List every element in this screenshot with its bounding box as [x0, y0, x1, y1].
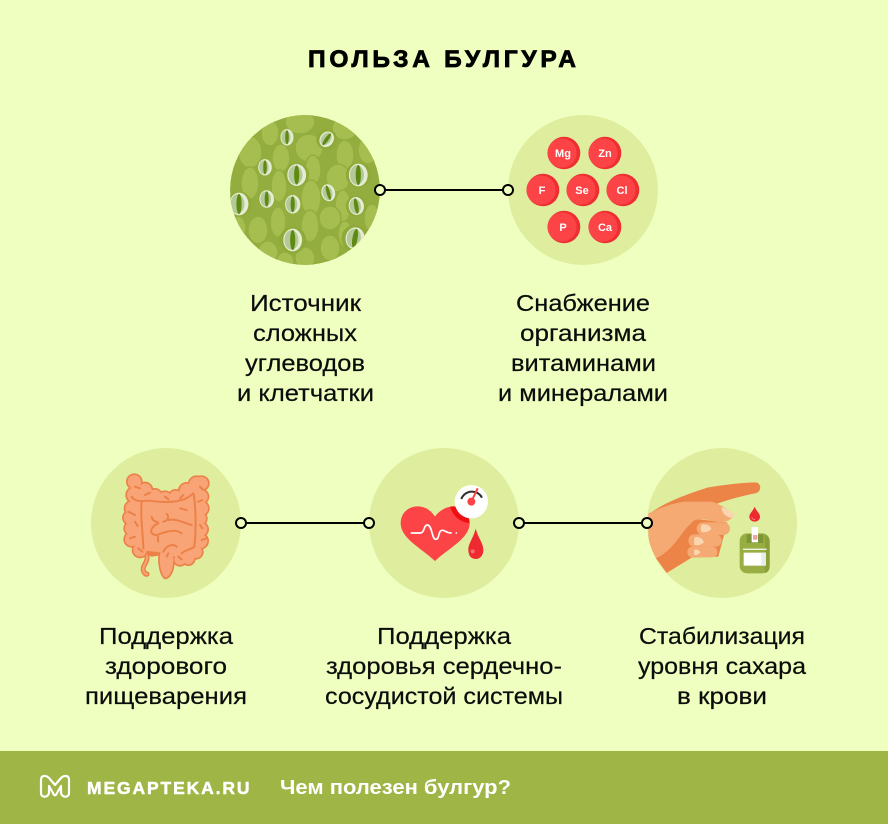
- icon: intestines: [91, 448, 241, 598]
- icon: heart, gauge and blood drop: [369, 448, 519, 598]
- icon: mineral badges: Se: [575, 185, 589, 197]
- label: cardiovascular: [325, 623, 563, 709]
- icon: mineral badges: P: [559, 222, 567, 234]
- icon: mineral badges: Cl: [616, 185, 628, 197]
- connector: heart to blood sugar: [514, 518, 652, 528]
- label: minerals: организма: [520, 320, 646, 346]
- icon: mineral badges: Mg: [555, 148, 571, 160]
- footer caption: Чем полезен булгур?: [280, 777, 511, 799]
- icon: mineral badges: [508, 115, 658, 265]
- label: carbohydrates: углеводов: [245, 350, 365, 376]
- title: ПОЛЬЗА БУЛГУРА: [308, 46, 576, 73]
- connector: digestion to heart: [236, 518, 374, 528]
- label: digestion: [85, 623, 247, 709]
- label: blood sugar: Стабилизация: [639, 623, 805, 649]
- panel: vitamins and minerals: [498, 115, 668, 406]
- icon: mineral badges: Zn: [598, 148, 612, 160]
- logo wordmark: MEGAPTEKA.RU: [87, 778, 250, 798]
- icon: hand and glucose meter: [647, 448, 797, 598]
- label: cardiovascular: сосудистой системы: [325, 683, 563, 709]
- footer band: [0, 751, 888, 824]
- icon: plant cells: [226, 110, 380, 272]
- icon: mineral badges: Ca: [598, 222, 613, 234]
- label: minerals: витаминами: [511, 350, 656, 376]
- panel: digestion: [85, 448, 247, 709]
- label: carbohydrates: [237, 290, 374, 406]
- panel: blood sugar: [638, 448, 806, 709]
- label: cardiovascular: Поддержка: [377, 623, 511, 649]
- label: blood sugar: уровня сахара: [638, 653, 806, 679]
- label: minerals: и минералами: [498, 380, 668, 406]
- label: digestion: пищеварения: [85, 683, 247, 709]
- panel: cardiovascular health: [325, 448, 563, 709]
- label: digestion: Поддержка: [99, 623, 233, 649]
- label: minerals: Снабжение: [516, 290, 650, 316]
- connector: top row: [375, 185, 513, 195]
- label: carbohydrates: Источник: [250, 290, 362, 316]
- label: carbohydrates: и клетчатки: [237, 380, 374, 406]
- label: minerals: [498, 290, 668, 406]
- label: carbohydrates: сложных: [253, 320, 358, 346]
- icon: mineral badges: F: [539, 185, 546, 197]
- label: blood sugar: в крови: [677, 683, 767, 709]
- panel: complex carbohydrates and fiber: [226, 110, 380, 406]
- label: blood sugar: [638, 623, 806, 709]
- label: digestion: здорового: [105, 653, 227, 679]
- label: cardiovascular: здоровья сердечно-: [326, 653, 562, 679]
- icon: Megapteka logo: [41, 776, 69, 797]
